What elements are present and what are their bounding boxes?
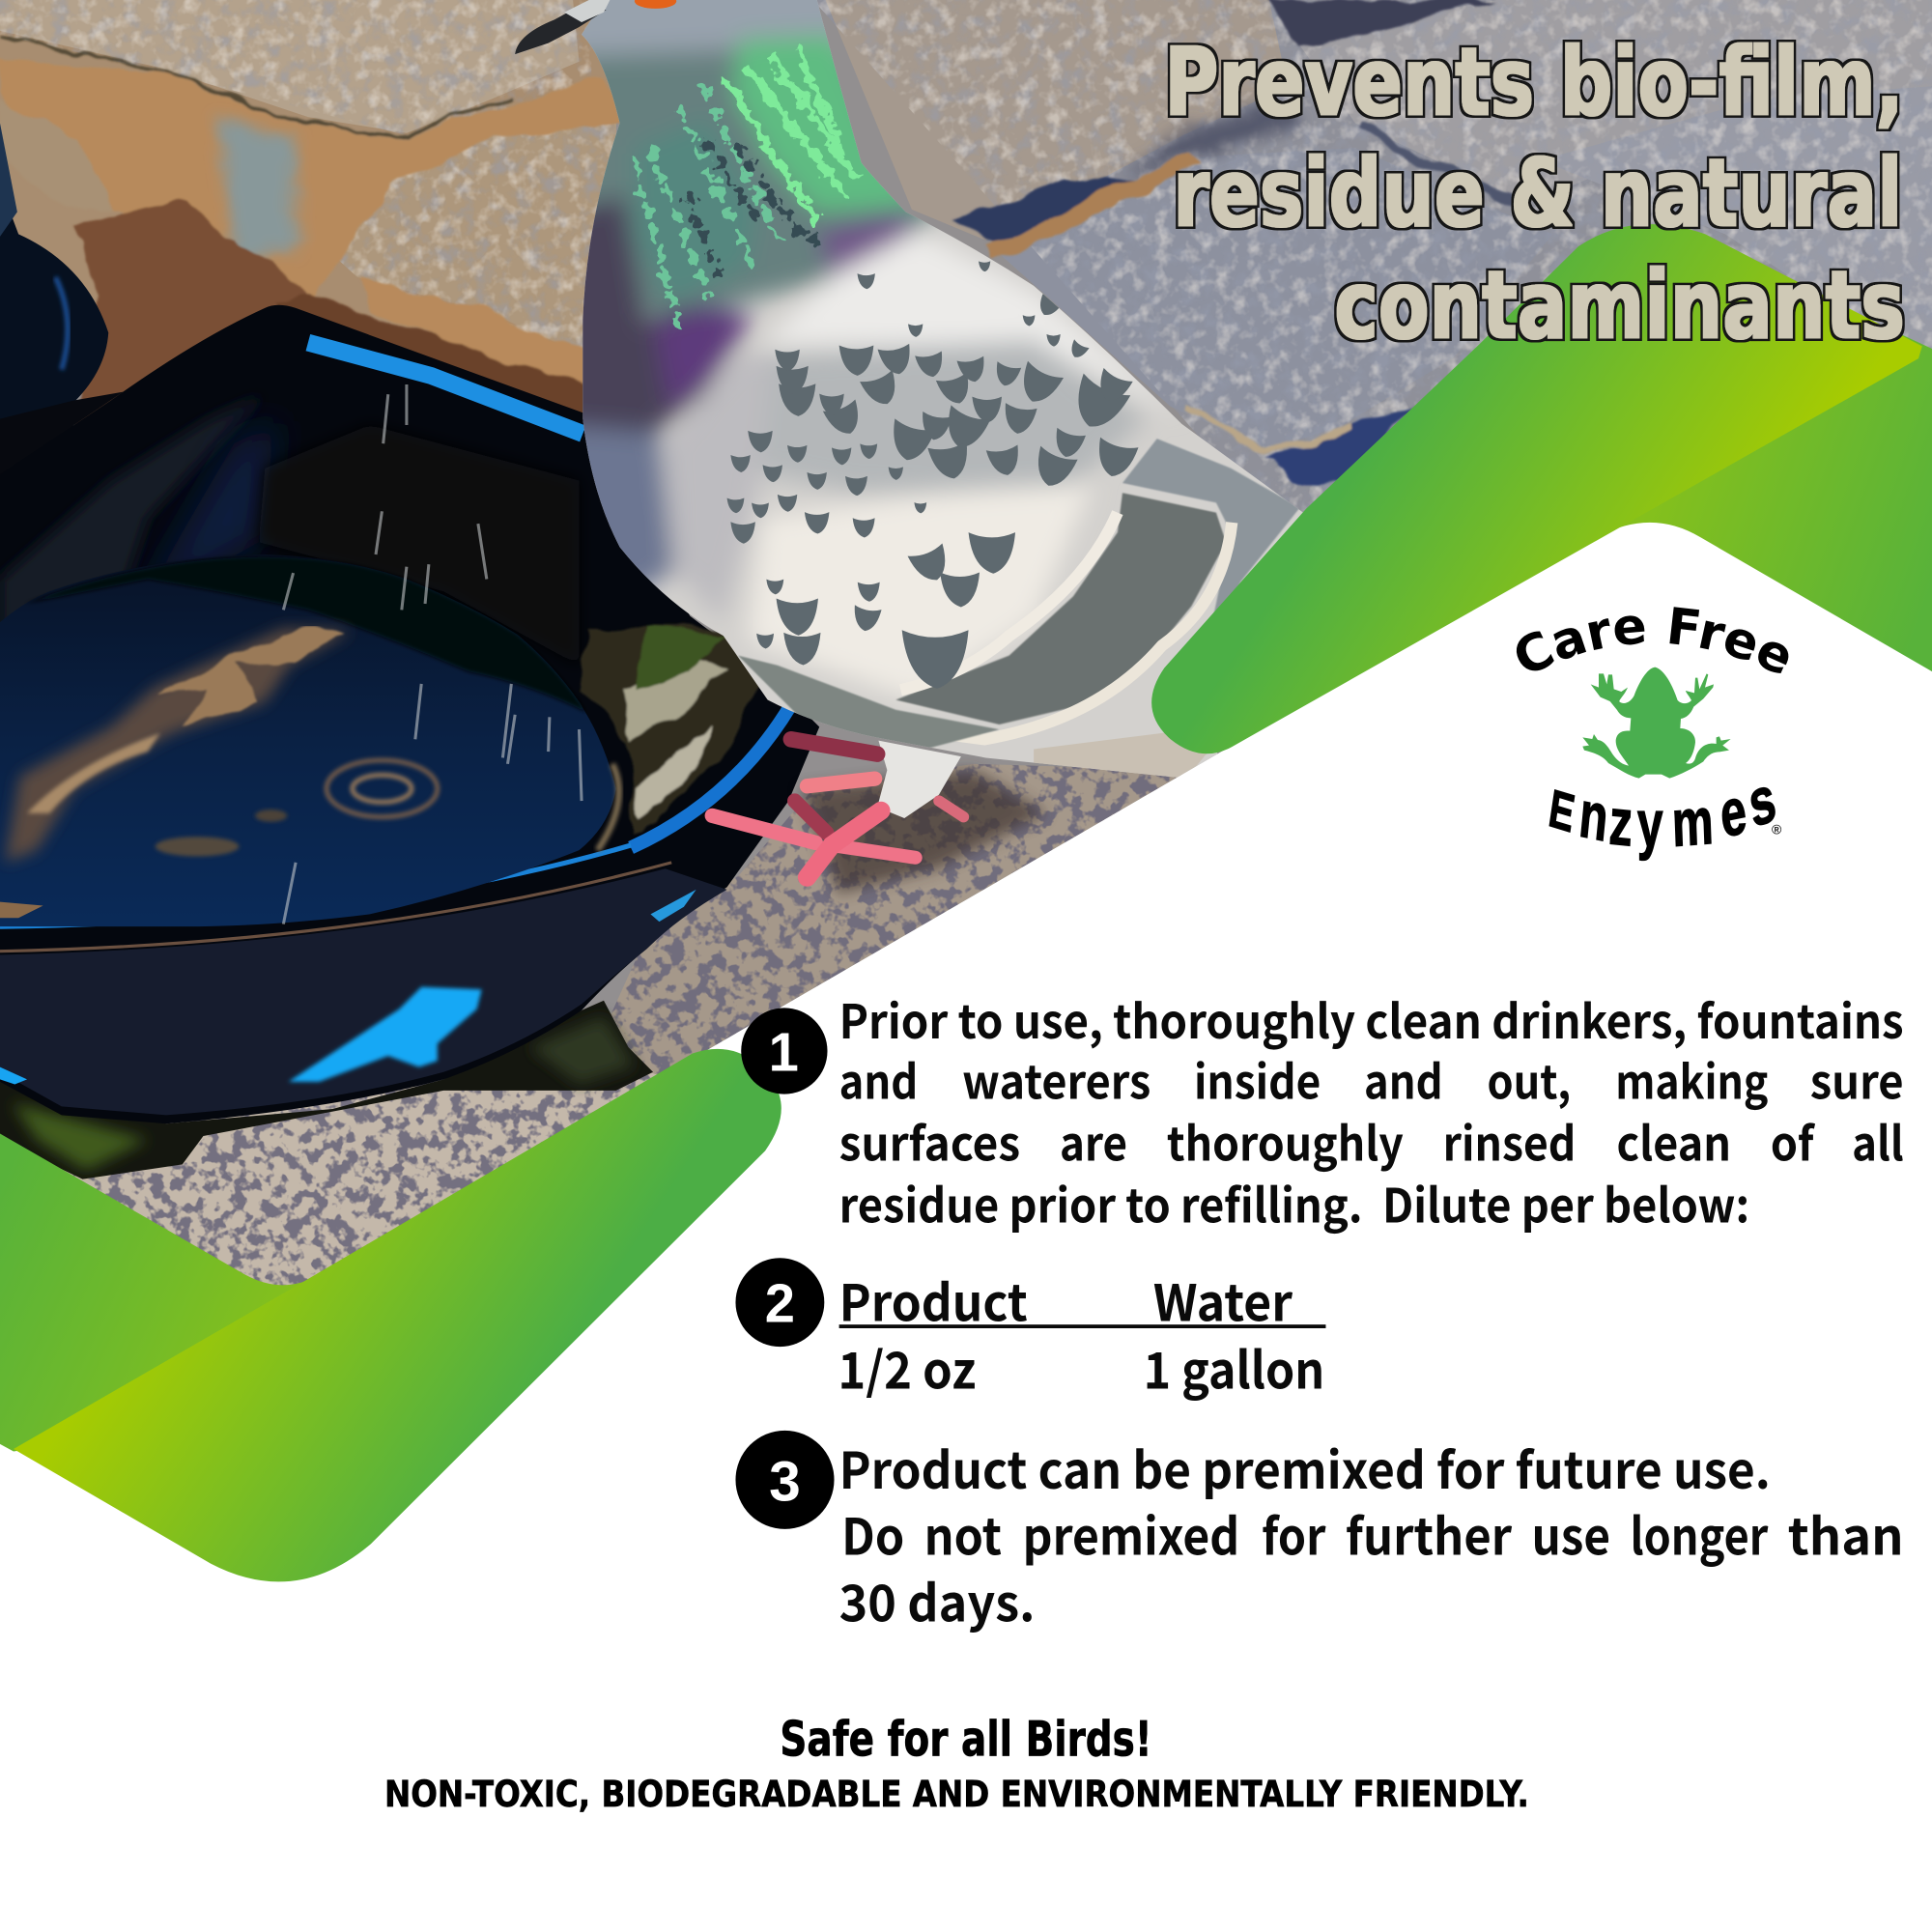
step 2 badge [735,1258,824,1347]
step 1 text [839,984,1904,1236]
step 3 text: longer [1631,1497,1769,1571]
step 2 dilution table: Product [839,1263,1028,1336]
step 1 badge: 1 [769,1021,799,1082]
step 2 dilution table: Water [1153,1263,1293,1336]
pigeon beak and eye [515,0,676,54]
step 3 text: than [1788,1497,1904,1571]
step 1 text: sure [1810,1045,1904,1113]
pigeon legs and feet [712,739,963,877]
step 3 text: use [1531,1497,1610,1571]
step 3 text: Product can be premixed for future use. [839,1431,1771,1504]
water pool [0,384,619,926]
step 1 text: are [1060,1107,1127,1175]
step 3 text: for [1262,1497,1326,1571]
green ribbon: bottom left, front [14,1049,781,1581]
footer subheading: NON-TOXIC, BIODEGRADABLE AND ENVIRONMENTALLY FRIENDLY. [384,1773,1529,1815]
blue paint [288,987,482,1082]
step 1 text: rinsed [1443,1107,1576,1175]
blue rim top [308,343,582,434]
step 1 text: of [1771,1107,1815,1175]
step 1 text: clean [1616,1107,1731,1175]
step 3 text [839,1431,1904,1637]
step 3 text: 30 days. [839,1564,1035,1637]
step 1 text: inside [1194,1045,1321,1113]
drinker body [0,305,819,1123]
head and neck [492,0,1181,699]
moss reflection on rim [579,629,764,838]
moss and dark crack below drinker [0,1001,653,1179]
cobblestones upper right [813,0,1932,529]
green ribbon: top right, rear [1589,332,1932,671]
logo word: Care Free: Care Free [1517,607,1789,673]
step 1 badge [741,1008,828,1094]
registered mark: ® [1772,821,1782,837]
cobble gaps [949,0,1528,483]
step 3 badge [735,1431,835,1529]
step 3 text: premixed [1023,1497,1239,1571]
step 1 text: and [839,1045,918,1113]
drinker post [0,124,124,493]
headline [1164,28,1905,359]
lower tray, navy [0,868,727,1115]
icon: green frog [1582,668,1731,779]
step 1 text: surfaces [839,1107,1020,1175]
stone speckle texture [0,0,1932,1319]
step 2 dilution table: 1/2 oz [838,1330,976,1404]
photo: pigeon at water drinker [0,0,1932,1355]
step 3 badge: 3 [769,1451,801,1514]
basin highlights [0,400,254,622]
step 1 text: all [1852,1107,1904,1175]
step 3 text: further [1346,1497,1512,1571]
logo word: Enzymes: Enzymes [1546,762,1780,861]
pigeon [492,0,1319,783]
blue rim right [631,705,791,848]
step 2 badge: 2 [765,1273,795,1334]
step 1 text: making [1615,1045,1768,1113]
tan stones upper left [0,0,616,394]
puddle and brown ground [0,35,622,425]
wing scale marks [727,261,1138,689]
step 2 dilution table [838,1263,1325,1404]
lower wing dark band [895,493,1226,724]
step 3 text: Do [841,1497,904,1571]
lower granite stones [0,764,1182,1306]
logo: Care Free Enzymes [1517,607,1789,862]
step 3 text: not [924,1497,1002,1571]
step 1 text: waterers [962,1045,1151,1113]
neck feather streaks [635,49,856,326]
green ribbon: top right, front [1151,224,1922,753]
dark ground under pigeon foot [801,770,1047,894]
step 1 text: thoroughly [1167,1107,1404,1175]
green ribbon: bottom left, rear [0,1133,370,1452]
step 2 dilution table: 1 gallon [1144,1330,1324,1404]
step 1 text: and [1364,1045,1443,1113]
footer heading: Safe for all Birds! [780,1712,1152,1768]
step 1 text: residue prior to refilling. Dilute per below: [839,1168,1749,1236]
step 1 text: out, [1488,1045,1571,1113]
